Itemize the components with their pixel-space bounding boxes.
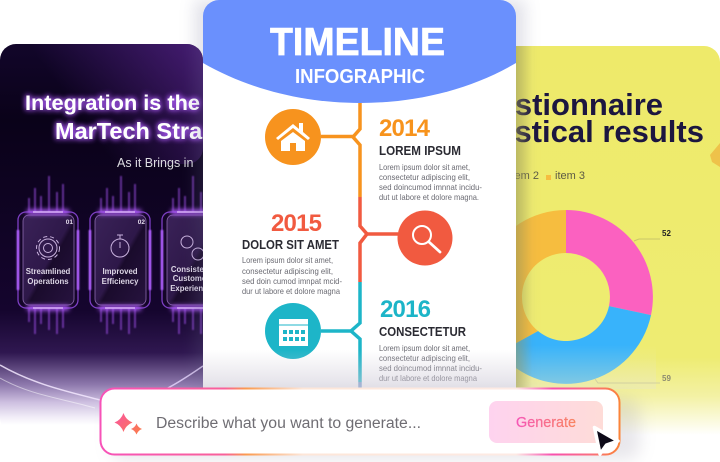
entry: 2015: consectetur adipiscing elit, bbox=[242, 267, 333, 276]
entry: 2014: LOREM IPSUM bbox=[379, 143, 461, 158]
header: blue banner bbox=[203, 0, 516, 103]
icon: gear bbox=[36, 236, 60, 260]
entry: 2016: consectetur adipiscing elit, bbox=[379, 354, 470, 363]
entry: 2014: consectetur adipiscing elit, bbox=[379, 173, 470, 182]
card: improved efficiency: Improved bbox=[102, 267, 138, 276]
entry: 2016: 2016 bbox=[380, 296, 431, 323]
panel: MarTech slide (left) bbox=[0, 44, 203, 422]
card: consistent customer experience: Consistent bbox=[171, 265, 212, 274]
card: consistent customer experience bbox=[162, 176, 222, 334]
heading: questionnaire title: Questionnaire bbox=[455, 87, 663, 122]
card: improved efficiency bbox=[90, 176, 150, 334]
entry: 2015: 2015 bbox=[271, 210, 322, 237]
card: streamlined operations: Streamlined bbox=[26, 267, 71, 276]
label: value 59 bbox=[595, 374, 671, 383]
panel: timeline infographic (center) bbox=[203, 0, 516, 388]
label: value 52 bbox=[634, 229, 671, 241]
entry: 2014: Lorem ipsum dolor sit amet, bbox=[379, 163, 470, 172]
icon: yellow 3D shape bbox=[710, 143, 720, 167]
legend: item 3 bbox=[555, 170, 585, 182]
card: consistent customer experience: Customer bbox=[173, 274, 209, 283]
entry: 2016: sed doincumod imnnat incidu- bbox=[379, 364, 482, 373]
entry: 2015 bbox=[242, 210, 342, 296]
panel: questionnaire slide (right) bbox=[451, 46, 720, 435]
heading: slide title: MarTech Stra bbox=[55, 118, 203, 144]
shadow: prompt box bbox=[110, 398, 640, 460]
prompt box bbox=[100, 388, 620, 454]
card: improved efficiency: Efficiency bbox=[102, 277, 139, 286]
icon: customers bbox=[181, 236, 204, 260]
entry: 2015: DOLOR SIT AMET bbox=[242, 237, 339, 252]
card: streamlined operations bbox=[18, 176, 78, 334]
entry: 2016: CONSECTETUR bbox=[379, 324, 467, 339]
donut chart bbox=[479, 210, 656, 389]
heading: questionnaire title bbox=[451, 87, 704, 149]
label: value 52: 52 bbox=[662, 229, 671, 238]
card: streamlined operations: 01 bbox=[66, 219, 73, 226]
icon: cursor arrow bbox=[594, 428, 618, 454]
entry: 2016 bbox=[379, 296, 482, 383]
heading: INFOGRAPHIC: INFOGRAPHIC bbox=[295, 66, 425, 88]
timeline spine bbox=[321, 103, 398, 388]
card: consistent customer experience: Experience bbox=[170, 284, 212, 293]
heading: slide title: Integration is the bbox=[25, 92, 200, 115]
card: streamlined operations: Operations bbox=[27, 277, 69, 286]
button: Generate bbox=[489, 401, 603, 443]
text: slide subtitle: As it Brings in bbox=[117, 156, 193, 170]
heading: TIMELINE: TIMELINE bbox=[270, 21, 445, 64]
entry: 2016: dur ut labore et dolore magna bbox=[379, 374, 477, 383]
entry: 2014: sed doincumod imnnat incidu- bbox=[379, 183, 482, 192]
icon: house bbox=[265, 109, 321, 165]
icon: magnifier bbox=[398, 210, 452, 266]
entry: 2016: Lorem ipsum dolor sit amet, bbox=[379, 344, 470, 353]
entry: 2015: dur ut labore et dolore magna bbox=[242, 287, 340, 296]
icon: calendar bbox=[265, 303, 321, 359]
shadow: center card bbox=[195, 0, 525, 395]
button: Generate: Generate bbox=[516, 415, 576, 431]
heading: questionnaire title: statistical results bbox=[451, 114, 704, 149]
entry: 2015: Lorem ipsum dolor sit amet, bbox=[242, 256, 333, 265]
entry: 2014 bbox=[379, 115, 482, 202]
label: value 59: 59 bbox=[662, 374, 671, 383]
icon: sparkle bbox=[114, 413, 142, 434]
entry: 2014: 2014 bbox=[379, 115, 431, 142]
card: improved efficiency: 02 bbox=[138, 219, 145, 226]
heading: slide title bbox=[25, 92, 203, 144]
entry: 2014: dut ut labore et dolore magna. bbox=[379, 193, 479, 202]
text: prompt placeholder: Describe what you want to generate... bbox=[156, 415, 421, 432]
legend: item 2 bbox=[509, 170, 539, 182]
icon: stopwatch bbox=[111, 235, 129, 257]
entry: 2015: sed doin cumod imnpat mcid- bbox=[242, 277, 342, 286]
legend bbox=[509, 170, 585, 182]
